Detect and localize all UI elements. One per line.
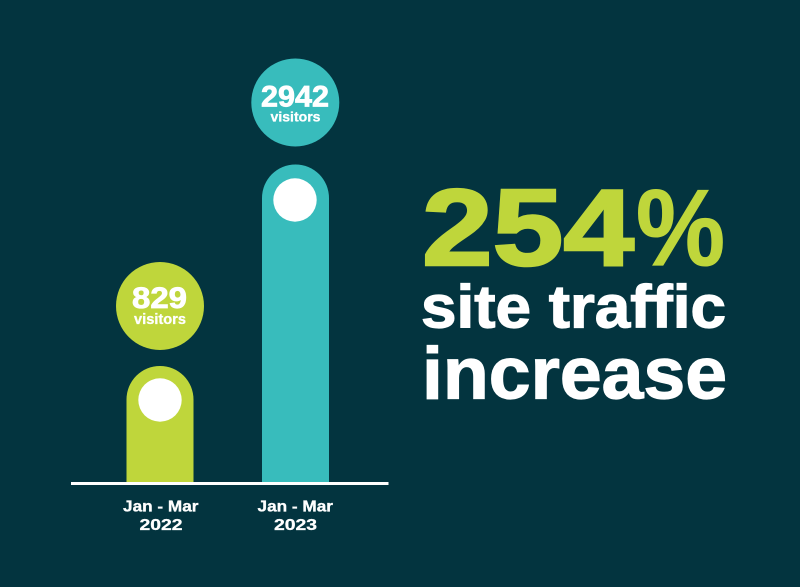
headline statistic: 254% [422, 167, 725, 289]
headline statistic: 254%: 254 [422, 167, 634, 289]
bubble: 829 visitors: visitors [134, 312, 186, 328]
bubble: 2942 visitors: visitors [270, 108, 321, 124]
label year: 2022: 2022 [140, 517, 183, 534]
bar chart [71, 58, 388, 534]
bubble: 829 visitors: 829 [132, 282, 187, 315]
headline statistic: 254%: % [636, 167, 725, 289]
label: Jan - Mar 2022: Jan - Mar [123, 498, 198, 516]
axis line [71, 482, 388, 485]
bar: 2022 [126, 366, 194, 483]
headline text: site traffic: site traffic [421, 274, 726, 340]
label: Jan - Mar 2023: Jan - Mar [258, 498, 333, 516]
bubble: 829 visitors [116, 262, 204, 350]
bubble: 2942 visitors [251, 58, 339, 146]
headline text: increase: increase [422, 334, 727, 414]
bar: 2023 [262, 164, 329, 483]
bubble: 2942 visitors: 2942 [261, 80, 329, 114]
label year: 2023: 2023 [274, 517, 317, 534]
